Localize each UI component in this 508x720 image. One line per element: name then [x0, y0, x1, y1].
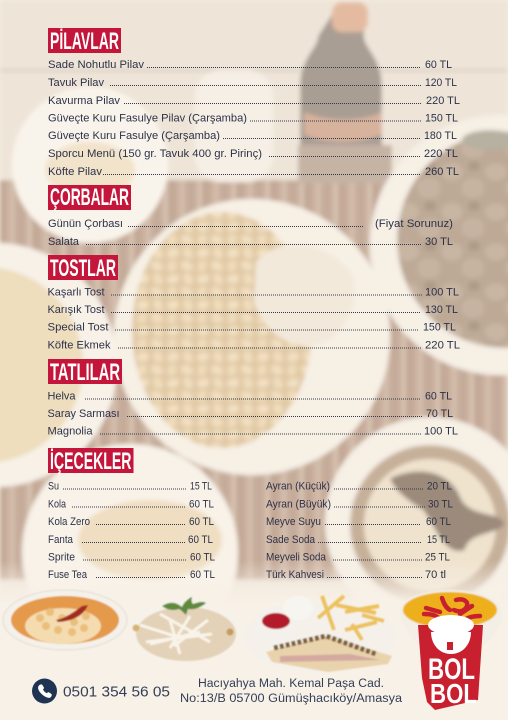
menu section: Tostlar items: 220 TL	[425, 340, 460, 352]
menu section: Pilavlar items: 220 TL	[424, 148, 458, 160]
menu section: İçecekler right column: Sade Soda	[266, 534, 316, 546]
menu section: İçecekler right column: 25 TL	[425, 552, 450, 564]
heading: Tatlılar: TATLILAR	[50, 359, 120, 386]
food photo: chickpea soup	[3, 590, 127, 650]
menu section: İçecekler right column: 15 TL	[427, 534, 450, 546]
menu section: Tatlılar items: 100 TL	[424, 426, 458, 438]
heading: Tatlılar	[48, 359, 122, 386]
menu section: Tostlar items: Kaşarlı Tost	[48, 286, 104, 298]
bottom right bowl	[325, 417, 508, 627]
menu section: Pilavlar items: 150 TL	[425, 112, 458, 124]
main plate	[114, 199, 390, 475]
menu section: Pilavlar items: 60 TL	[425, 59, 452, 71]
menu section: Pilavlar items: 180 TL	[424, 130, 457, 142]
menu section: İçecekler right column: 60 TL	[426, 516, 451, 528]
menu section: Tatlılar items: Saray Sarması	[48, 408, 120, 420]
logo: Bol Bol: BOL	[428, 653, 475, 686]
menu section: İçecekler right column	[266, 480, 453, 581]
menu section: Çorbalar items: Günün Çorbası	[48, 218, 123, 230]
menu section: Pilavlar items: Güveçte Kuru Fasulye Pilav (Çarşamba)	[48, 112, 247, 124]
menu section: İçecekler left column: 60 TL	[189, 498, 214, 510]
heading: Tostlar	[48, 255, 118, 282]
menu section: İçecekler right column: Türk Kahvesi	[266, 569, 324, 581]
menu section: İçecekler left column: 60 TL	[190, 552, 215, 564]
menu section: İçecekler left column: Fuse Tea	[48, 569, 88, 581]
heading: Çorbalar: ÇORBALAR	[50, 184, 129, 211]
menu section: İçecekler left column: Kola Zero	[48, 516, 90, 528]
menu section: Çorbalar items: (Fiyat Sorunuz)	[375, 218, 453, 230]
menu section: İçecekler left column: 60 TL	[190, 569, 215, 581]
heading: Pilavlar	[48, 28, 121, 55]
bottle	[300, 8, 382, 180]
food photo: shredded chicken pilav	[131, 597, 241, 661]
bottom left plate	[22, 444, 238, 660]
menu section: Çorbalar items: 30 TL	[425, 236, 453, 248]
menu section: Tatlılar items: 70 TL	[426, 408, 453, 420]
menu section: Pilavlar items: 120 TL	[425, 77, 457, 89]
icon: phone	[32, 678, 57, 704]
menu section: İçecekler left column: 15 TL	[190, 480, 212, 492]
menu section: İçecekler right column: Ayran (Büyük)	[266, 498, 331, 510]
address: No:13/B 05700 Gümüşhacıköy/Amasya	[180, 693, 403, 705]
menu section: İçecekler right column: Meyve Suyu	[266, 516, 321, 528]
left bowl	[0, 243, 117, 487]
right plate	[370, 115, 508, 375]
cup	[195, 70, 273, 182]
menu section: İçecekler left column: Kola	[48, 498, 67, 510]
menu section: İçecekler left column: Sprite	[48, 552, 75, 564]
menu section: Çorbalar items	[48, 218, 453, 248]
menu section: Pilavlar items: 220 TL	[426, 95, 460, 107]
menu section: İçecekler left column: Su	[48, 480, 59, 492]
menu section: Pilavlar items: Köfte Pilav	[48, 166, 103, 178]
menu section: Tostlar items: Köfte Ekmek	[48, 340, 111, 352]
menu section: Tatlılar items	[48, 390, 458, 438]
menu section: Pilavlar items	[48, 59, 460, 178]
menu section: İçecekler right column: 20 TL	[427, 480, 452, 492]
food photo: lentil soup bowl	[400, 590, 502, 656]
heading: Pilavlar: PİLAVLAR	[50, 28, 119, 55]
menu section: İçecekler left column	[48, 480, 215, 581]
menu section: Pilavlar items: Sporcu Menü (150 gr. Tavuk 400 gr. Pirinç)	[48, 148, 262, 160]
logo: Bol Bol	[418, 598, 483, 710]
menu section: Pilavlar items: 260 TL	[425, 166, 459, 178]
menu section: Tostlar items	[48, 286, 460, 352]
address: Hacıyahya Mah. Kemal Paşa Cad.	[198, 678, 384, 690]
menu section: Tostlar items: Special Tost	[48, 322, 108, 334]
menu section: Tatlılar items: Helva	[48, 390, 76, 402]
menu section: Pilavlar items: Kavurma Pilav	[48, 95, 121, 107]
menu section: Pilavlar items: Sade Nohutlu Pilav	[48, 59, 145, 71]
food photo: toast with fries	[242, 596, 398, 673]
menu section: İçecekler left column: Fanta	[48, 534, 74, 546]
menu section: İçecekler right column: 70 tl	[425, 569, 446, 581]
menu section: Pilavlar items: Güveçte Kuru Fasulye (Çarşamba)	[48, 130, 220, 142]
top left plate	[12, 87, 168, 243]
menu section: Tostlar items: 100 TL	[425, 286, 459, 298]
menu section: Tostlar items: Karışık Tost	[48, 304, 104, 316]
menu section: Tostlar items: 130 TL	[425, 304, 458, 316]
heading: Tostlar: TOSTLAR	[50, 255, 116, 282]
menu section: İçecekler left column: 60 TL	[188, 534, 213, 546]
heading: Çorbalar	[48, 184, 131, 211]
menu section: Pilavlar items: Tavuk Pilav	[48, 77, 104, 89]
menu section: İçecekler right column: Meyveli Soda	[266, 552, 327, 564]
menu section: Tatlılar items: Magnolia	[48, 426, 93, 438]
menu section: Çorbalar items: Salata	[48, 236, 80, 248]
heading: İçecekler: İÇECEKLER	[50, 448, 132, 475]
menu section: İçecekler left column: 60 TL	[189, 516, 214, 528]
menu section: Tatlılar items: 60 TL	[425, 390, 452, 402]
menu section: İçecekler right column: 30 TL	[428, 498, 453, 510]
menu section: İçecekler right column: Ayran (Küçük)	[266, 480, 330, 492]
address	[180, 678, 403, 705]
logo: Bol Bol: BOL	[430, 678, 477, 709]
heading: İçecekler	[48, 448, 134, 475]
menu section: Tostlar items: 150 TL	[423, 322, 456, 334]
phone number: 0501 354 56 05	[63, 684, 170, 700]
